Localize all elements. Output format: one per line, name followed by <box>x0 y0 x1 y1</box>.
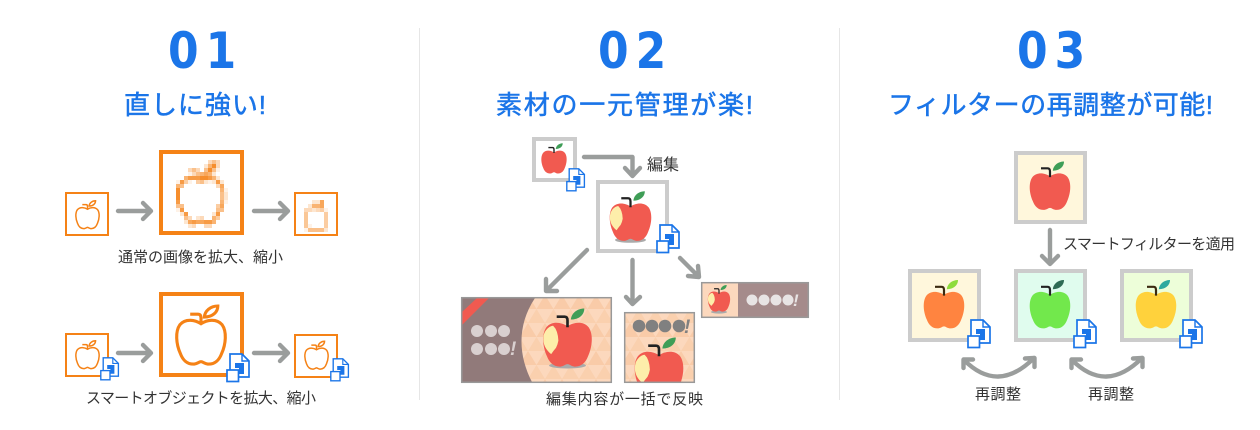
label readjust: 再調整 <box>1088 386 1134 403</box>
green apple <box>1016 271 1096 348</box>
strip banner: ! <box>793 291 799 310</box>
panel: 02 <box>462 22 808 408</box>
arrow <box>254 345 288 361</box>
label edit: 編集 <box>647 156 679 174</box>
panel: 01 <box>66 22 348 407</box>
edited smart object <box>598 182 679 252</box>
label readjust: 再調整 <box>975 386 1021 403</box>
orange apple <box>910 271 990 348</box>
heading 01: 直しに強い! <box>124 90 266 120</box>
strip banner <box>702 283 808 317</box>
label apply filter: スマートフィルターを適用 <box>1063 236 1235 253</box>
square banner: ! <box>684 317 690 338</box>
heading 03: フィルターの再調整が可能! <box>888 90 1213 120</box>
square banner <box>624 312 696 384</box>
arrow to strip <box>680 258 699 277</box>
arrow to banner <box>546 250 587 291</box>
source apple <box>1016 153 1085 222</box>
panel: 03 <box>888 22 1235 403</box>
small raster source <box>66 193 108 235</box>
arrow <box>118 203 151 219</box>
caption: 編集内容が一括で反映 <box>546 391 703 408</box>
arrow down <box>1042 230 1058 264</box>
smart object enlarged <box>161 294 249 382</box>
curved double arrow <box>964 358 1034 377</box>
smart object shrunk <box>295 335 348 381</box>
smart object small <box>66 334 118 380</box>
yellow apple <box>1122 271 1202 348</box>
edit arrow <box>584 157 640 176</box>
caption: 通常の画像を拡大、縮小 <box>118 249 283 266</box>
heading 02: 素材の一元管理が楽! <box>496 90 753 120</box>
caption: スマートオブジェクトを拡大、縮小 <box>86 389 316 407</box>
large banner: ! <box>510 339 516 360</box>
number 02: 02 <box>598 22 673 81</box>
source smart object <box>534 139 584 191</box>
shrunk blurred apple <box>295 193 337 235</box>
arrow <box>118 345 151 361</box>
divider <box>420 28 840 400</box>
number 03: 03 <box>1017 22 1092 81</box>
enlarged pixelated apple <box>161 152 242 233</box>
curved double arrow <box>1072 358 1142 377</box>
arrow <box>254 203 288 219</box>
number 01: 01 <box>168 22 243 81</box>
arrow to square <box>626 260 640 304</box>
large banner <box>462 298 611 382</box>
